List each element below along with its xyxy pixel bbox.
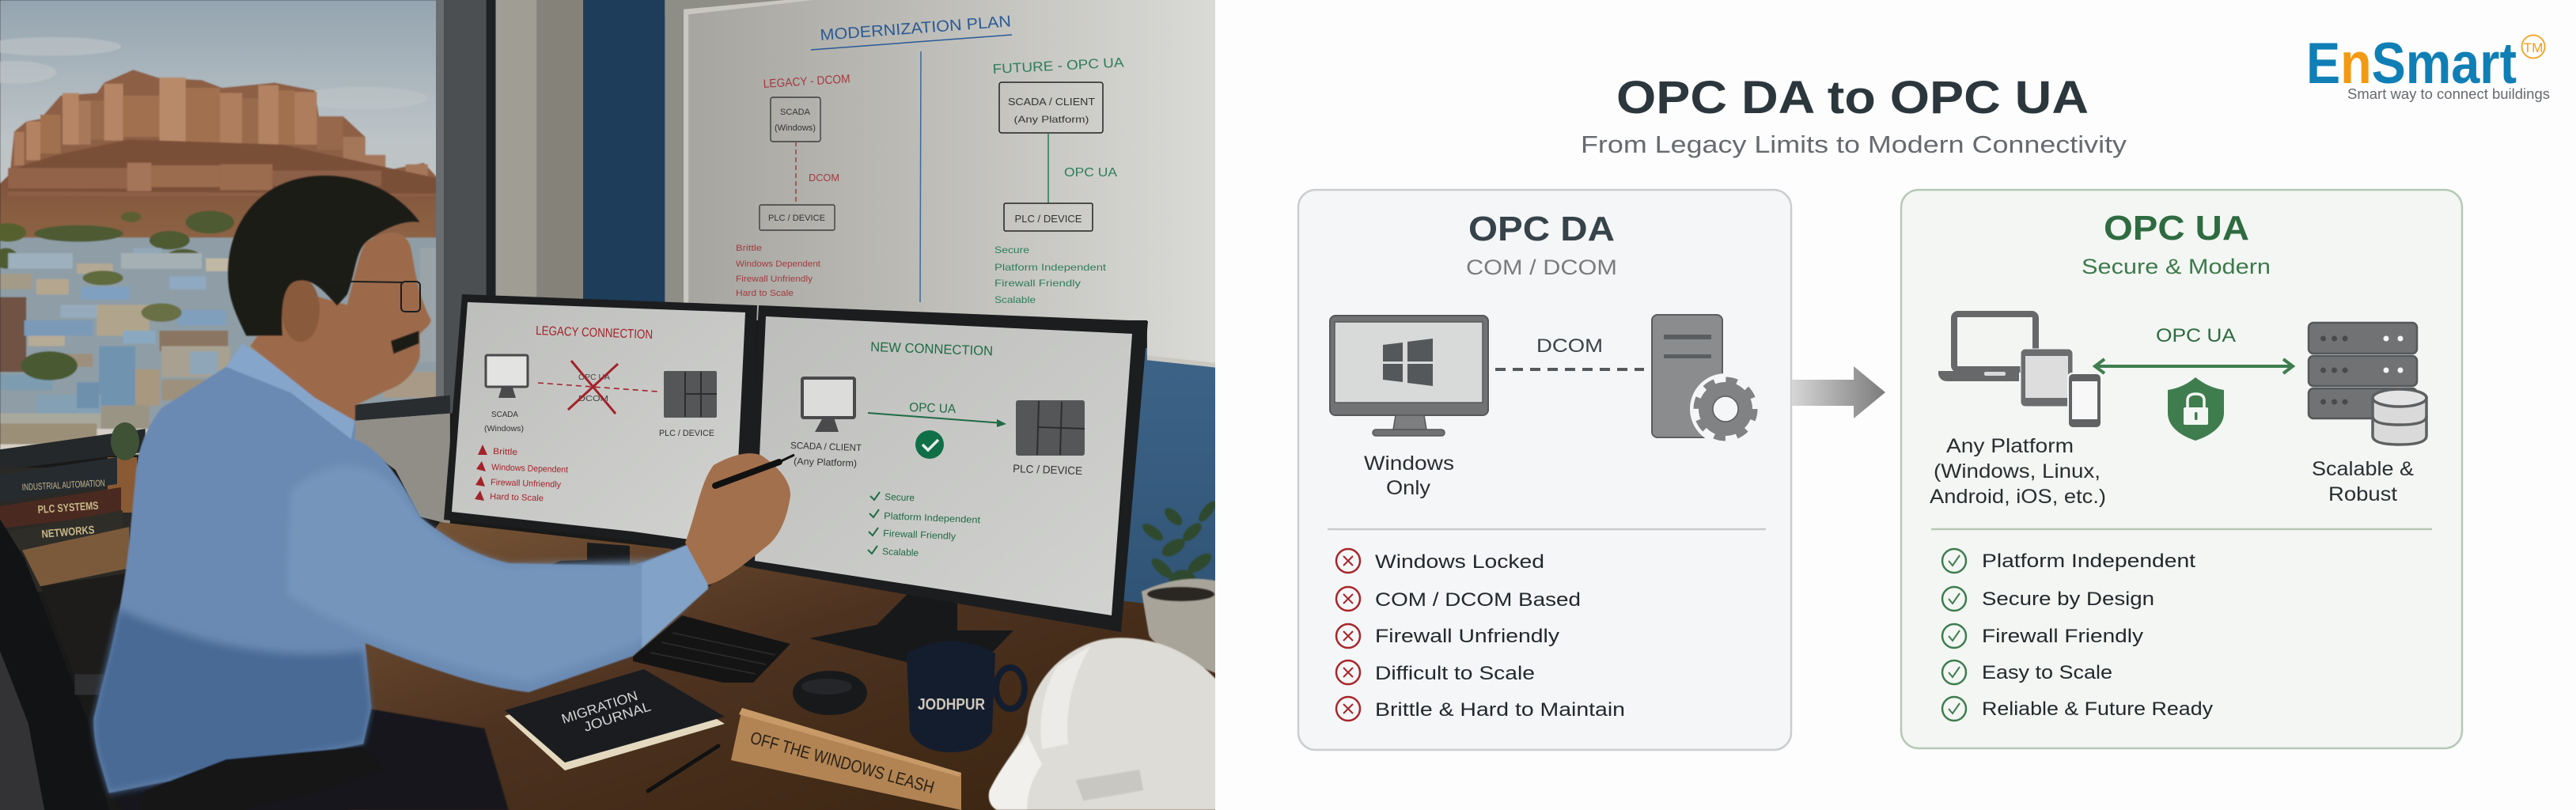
pen on desk: [648, 746, 718, 791]
trousers and chair arm: [109, 708, 509, 810]
whiteboard future column: [992, 55, 1125, 305]
label: Any Platform: Android, iOS, etc.): [1930, 486, 2106, 508]
item: COM / DCOM Based: [1336, 587, 1581, 611]
blue wall right of the whiteboard: [1123, 348, 1215, 604]
legacy connection screen content: (Windows): [484, 425, 524, 433]
window view: Jodhpur fort and blue city: [0, 0, 440, 455]
whiteboard future column: Scalable: [994, 294, 1036, 305]
icon: Windows desktop monitor: [1330, 316, 1488, 436]
whiteboard future column: PLC / DEVICE: [1014, 213, 1082, 225]
icon: shield with padlock: [2168, 377, 2224, 441]
whiteboard future column: Secure: [994, 244, 1029, 255]
glasses: [310, 281, 420, 312]
item: Windows Locked: Windows Locked: [1375, 551, 1544, 573]
whiteboard future column: OPC UA: [1064, 166, 1117, 180]
new connection screen content: Firewall Friendly: [883, 528, 956, 542]
new connection screen content: Secure: [885, 491, 915, 503]
connector: OPC UA two-way link: OPC UA: [2156, 325, 2236, 346]
label: Windows Only: Windows: [1364, 452, 1454, 475]
new connection screen content: Platform Independent: [884, 510, 981, 525]
coffee mug: JODHPUR: [918, 696, 985, 713]
item: Easy to Scale: [1942, 660, 2112, 684]
left monitor: [444, 294, 757, 609]
legacy connection screen content: DCOM: [578, 395, 608, 403]
left desk section and office chair: [0, 519, 129, 810]
whiteboard: [665, 0, 1218, 368]
new connection screen content: SCADA / CLIENT: [790, 440, 862, 453]
plant: [1141, 498, 1218, 674]
legacy connection screen content: PLC / DEVICE: [659, 429, 714, 438]
panel: OPC UA: [1901, 190, 2462, 748]
new connection screen content: OPC UA: [909, 401, 957, 416]
hair: [228, 176, 420, 336]
heading: OPC DA: OPC DA: [1468, 210, 1615, 248]
connector: OPC UA two-way link: [2095, 325, 2293, 373]
list: OPC DA limitations: [1336, 549, 1625, 721]
item: Difficult to Scale: Difficult to Scale: [1375, 663, 1535, 684]
engineer: [93, 176, 794, 810]
moustache: [391, 331, 419, 354]
whiteboard legacy column: DCOM: [809, 172, 839, 184]
legacy connection screen content: SCADA: [491, 411, 518, 419]
item: Platform Independent: Platform Independent: [1982, 551, 2195, 572]
label: Scalable & Robust: Scalable &: [2312, 458, 2414, 480]
whiteboard legacy column: Brittle: [736, 244, 762, 253]
whiteboard legacy column: [736, 72, 850, 298]
migration journal: MIGRATION: [559, 688, 639, 727]
desk surface: [348, 522, 1218, 810]
legacy connection screen content: Hard to Scale: [490, 492, 544, 503]
label: DCOM link: DCOM: [1536, 335, 1603, 357]
shirt: [93, 343, 708, 793]
subheading: Secure & Modern: Secure & Modern: [2082, 255, 2271, 278]
whiteboard future column: Platform Independent: [994, 262, 1107, 273]
left monitor stand: [552, 543, 712, 587]
panel: OPC DA: [1298, 190, 1791, 750]
coffee mug: [907, 641, 1025, 752]
item: COM / DCOM Based: COM / DCOM Based: [1375, 589, 1581, 611]
item: Difficult to Scale: [1336, 660, 1535, 684]
new connection screen content: (Any Platform): [794, 456, 857, 469]
migration journal: JOURNAL: [581, 699, 653, 735]
whiteboard heading: MODERNIZATION PLAN: [820, 13, 1012, 44]
item: Platform Independent: [1942, 549, 2195, 573]
heading: OPC UA: OPC UA: [2104, 209, 2249, 248]
new connection screen content: NEW CONNECTION: [870, 339, 993, 358]
books and cactus on the sill: PLC SYSTEMS: [37, 499, 99, 516]
photo: engineer at desk planning the OPC migration: [0, 0, 1218, 810]
whiteboard legacy column: Windows Dependent: [736, 259, 820, 269]
whiteboard legacy column: Hard to Scale: [736, 289, 794, 298]
legacy connection screen content: Brittle: [493, 447, 517, 457]
item: Secure by Design: [1942, 587, 2154, 611]
new connection screen content: [790, 339, 1085, 558]
label: Windows Only: [1364, 452, 1454, 499]
neck and face: [250, 233, 431, 421]
whiteboard legacy column: PLC / DEVICE: [768, 214, 825, 223]
item: Windows Locked: [1336, 549, 1544, 573]
legacy connection screen content: Windows Dependent: [491, 463, 568, 475]
whiteboard legacy column: SCADA: [780, 108, 811, 117]
item: Firewall Unfriendly: [1336, 624, 1559, 648]
main title: OPC DA to OPC UA: [1616, 72, 2089, 123]
migration journal: [505, 669, 725, 791]
new connection screen content: PLC / DEVICE: [1013, 462, 1082, 477]
legacy connection screen content: Firewall Unfriendly: [491, 478, 562, 490]
item: Brittle & Hard to Maintain: [1336, 697, 1625, 721]
item: Reliable & Future Ready: Reliable & Future Ready: [1982, 698, 2213, 720]
item: Secure by Design: Secure by Design: [1982, 589, 2154, 610]
whiteboard future column: FUTURE - OPC UA: [992, 55, 1125, 77]
new connection screen content: Scalable: [882, 546, 919, 558]
legacy connection screen content: OPC UA: [578, 373, 610, 382]
label: Windows Only: Only: [1386, 477, 1431, 499]
label: Scalable & Robust: Robust: [2328, 483, 2397, 505]
item: Firewall Unfriendly: Firewall Unfriendly: [1375, 626, 1559, 647]
item: Brittle & Hard to Maintain: Brittle & Hard to Maintain: [1375, 699, 1625, 721]
whiteboard legacy column: Firewall Unfriendly: [736, 274, 813, 284]
books and cactus on the sill: INDUSTRIAL AUTOMATION: [21, 478, 105, 493]
label: Scalable & Robust: [2312, 458, 2414, 505]
logo: EnSmart: Smart way to connect buildings: [2347, 86, 2550, 102]
hard hat: [989, 638, 1218, 810]
whiteboard future column: Firewall Friendly: [994, 278, 1081, 289]
item: Easy to Scale: Easy to Scale: [1982, 662, 2112, 683]
list: OPC UA benefits: [1942, 549, 2213, 721]
books and cactus on the sill: [0, 422, 139, 551]
label: Any Platform: Any Platform: [1946, 435, 2074, 457]
icon: server rack with database: [2309, 323, 2426, 445]
whiteboard future column: (Any Platform): [1014, 114, 1089, 125]
whiteboard future column: SCADA / CLIENT: [1008, 96, 1095, 108]
desk items: keyboard and mouse: [633, 615, 867, 715]
logo: EnSmart: EnSmart: [2306, 32, 2517, 96]
item: Firewall Friendly: Firewall Friendly: [1982, 626, 2143, 647]
whiteboard legacy column: (Windows): [775, 123, 816, 133]
right monitor: [745, 305, 1148, 662]
nameplate: [731, 708, 961, 810]
legacy connection screen content: [475, 324, 717, 503]
nameplate: OFF THE WINDOWS LEASH: [748, 728, 937, 797]
logo: EnSmart: TM: [2524, 40, 2543, 55]
icon: server with gear: [1652, 315, 1761, 445]
subtitle: From Legacy Limits to Modern Connectivity: [1581, 131, 2127, 158]
hand and marker: [685, 453, 794, 585]
item: Firewall Friendly: [1942, 624, 2143, 648]
whiteboard legacy column: LEGACY - DCOM: [763, 72, 850, 91]
label: Any Platform: (Windows, Linux,: [1934, 460, 2101, 483]
label: Any Platform: [1930, 435, 2106, 508]
window frame, column and blue wall: [0, 0, 668, 592]
subheading: COM / DCOM: COM / DCOM: [1466, 255, 1617, 279]
icon: laptop, tablet and phone: [1938, 314, 2102, 429]
books and cactus on the sill: NETWORKS: [41, 523, 95, 540]
arrow: from OPC DA to OPC UA: [1792, 366, 1885, 418]
item: Reliable & Future Ready: [1942, 697, 2213, 721]
legacy connection screen content: LEGACY CONNECTION: [536, 324, 653, 342]
